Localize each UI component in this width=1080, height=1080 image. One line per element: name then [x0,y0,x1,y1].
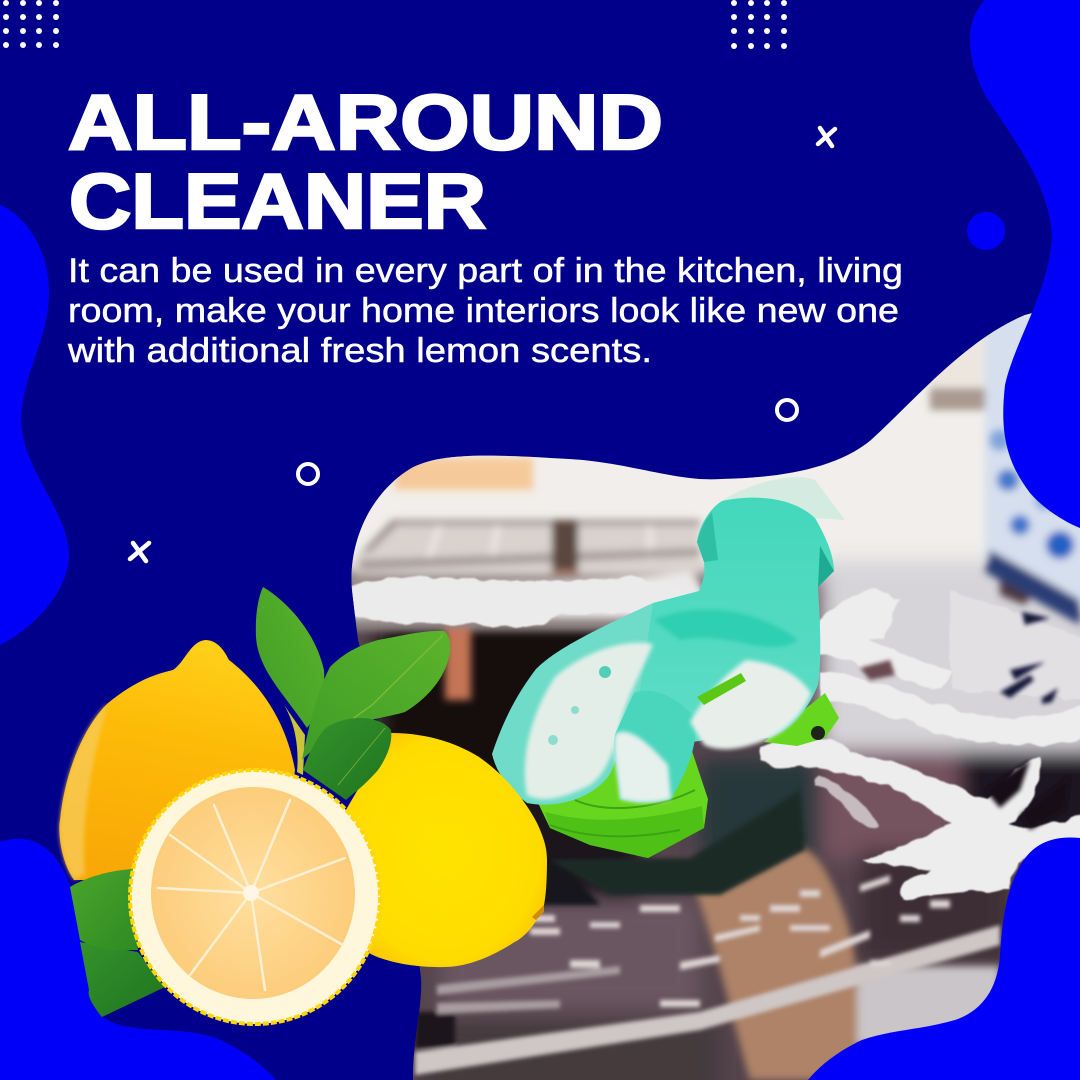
dots: top center pattern [731,0,787,49]
body text [67,252,903,370]
leaf: small middle [303,718,391,800]
lemon tip [532,905,544,920]
lemon half: rind [130,770,380,1024]
body text: room, make your home interiors look like new one [68,292,899,330]
glove: teal rubber with foam [492,477,845,805]
finger one [492,603,653,805]
icon: cross top right [818,128,835,146]
dark streaks and reflections [415,612,1070,1075]
cloth: green microfiber [511,693,839,858]
leaf: big right [302,631,450,760]
illustration: lemons and leaves [59,587,547,1024]
lemon half: center [243,885,259,901]
lemon half: flesh [151,787,355,999]
photo: gloved hand cleaning stove top [320,280,1080,1080]
finger two [614,691,696,802]
stem [284,705,305,775]
body text: with additional fresh lemon scents. [67,332,652,370]
leaf: lower left upper [70,869,138,950]
accent circle: solid blue [967,212,1005,250]
blob: bottom right bright blue [808,837,1080,1080]
lemon: left whole [59,640,295,880]
title: CLEANER [69,157,486,245]
lemon: right whole [340,733,547,967]
dots: top left pattern [3,0,59,48]
foam on knuckles [690,660,811,749]
blob: left bright blue [0,205,69,645]
blob: bottom left bright blue [0,839,276,1080]
foam streaks on the stove top [350,575,1080,899]
title [68,78,663,245]
lemon half: segment lines [158,800,345,990]
title: ALL-AROUND [68,78,663,166]
leaf: top [256,587,324,728]
icon: ring right [777,400,797,420]
glove wrist and back of hand [640,498,834,742]
icon: ring left [298,464,318,484]
leaf: lower left back [80,942,165,1017]
blob: top right bright blue [970,0,1080,528]
icon: cross left [130,543,149,561]
body text: It can be used in every part of in the kitchen, living [68,252,903,290]
